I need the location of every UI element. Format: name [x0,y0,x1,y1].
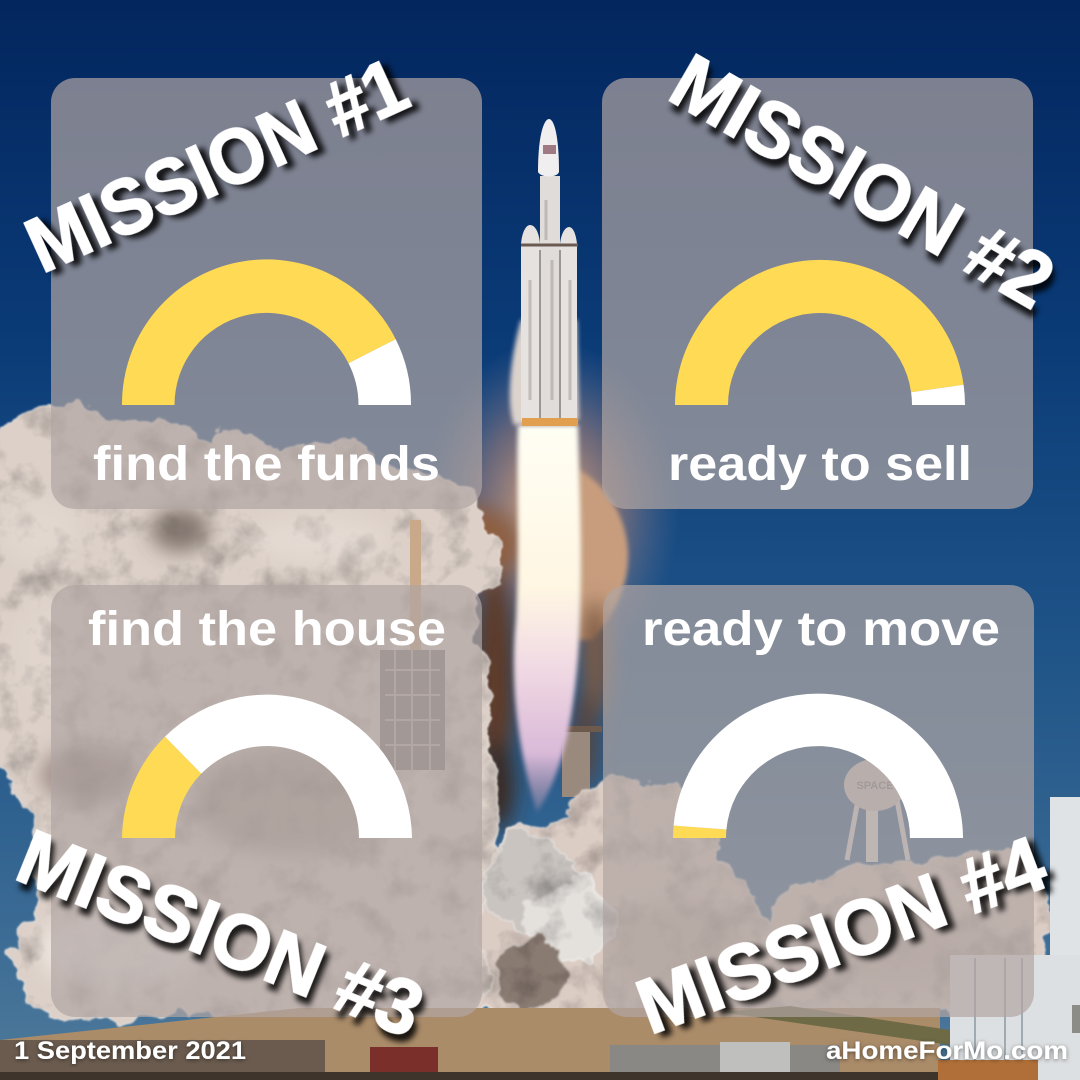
label: ready to sell: ready to sell [668,438,972,491]
gauge: find the funds [122,259,411,405]
footer date: 1 September 2021 [14,1037,246,1065]
water tower: SPACE [856,780,894,792]
gauge: ready to sell [675,260,965,405]
heading: mission 2: MISSION #2 [656,37,1069,325]
engine glow [420,340,680,680]
smoke cloud: center and right mass [480,775,1050,1015]
gauge: ready to move [673,694,963,838]
panel: mission 2 [602,78,1033,509]
water tower [844,759,908,862]
panel: mission 1 [51,78,482,509]
panel: mission 4 [603,585,1034,1017]
smoke shading [0,495,390,995]
smoke: peach cloud beside flame [578,470,628,640]
smoke shading: right cloud [610,900,1000,1000]
ground [0,1006,1080,1080]
label: find the house: find the house [88,603,446,656]
footer website: aHomeForMo.com [826,1037,1068,1065]
small launch gantry [547,726,602,797]
smoke: dark scorched layer near flame [420,505,609,830]
building [938,797,1080,1080]
smoke: grey-white billow under rocket [485,835,612,1011]
smoke cloud: left mass [0,405,505,1020]
gauge: find the house [122,695,412,838]
heading: mission 3: MISSION #3 [6,812,435,1054]
rocket exhaust flame [514,425,581,812]
heading: mission 4: MISSION #4 [625,819,1057,1051]
label: ready to move: ready to move [642,603,1000,656]
rocket [510,119,579,426]
launch tower [380,520,445,770]
label: find the funds: find the funds [93,438,440,491]
heading: mission 1: MISSION #1 [13,40,420,289]
panel: mission 3 [51,585,482,1017]
